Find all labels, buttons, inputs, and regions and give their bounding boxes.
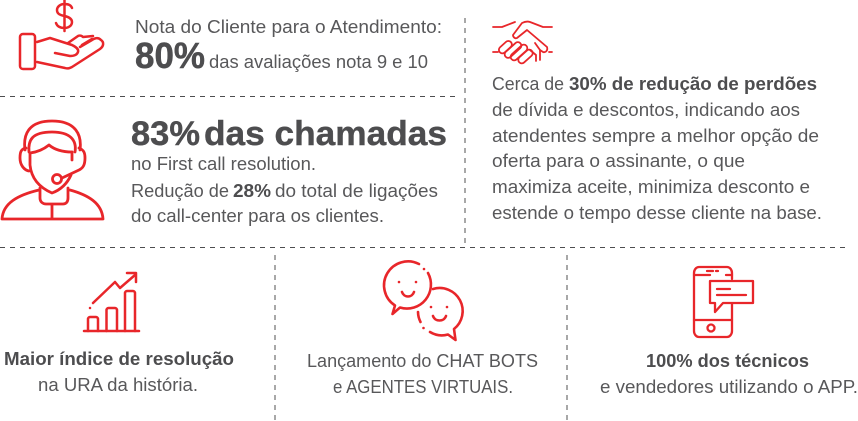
text: technicians using the app: e vendedores utilizando o APP.	[600, 376, 858, 397]
icon: smiling chat bubbles	[384, 261, 463, 340]
text: loss reduction paragraph: oferta para o assinante, o que	[492, 150, 745, 171]
text: loss reduction paragraph: de dívida e descontos, indicando aos	[492, 99, 800, 120]
text: highest resolution index: Maior índice de resolução	[4, 348, 234, 369]
icon: hand holding dollar	[20, 0, 103, 69]
text: first call resolution details: do call-center para os clientes.	[131, 205, 384, 226]
text: loss reduction paragraph	[492, 73, 822, 223]
text: chatbots launch: Lançamento do CHAT BOTS	[307, 350, 538, 371]
stat: 80% of ratings	[135, 35, 428, 76]
stat: 83% of calls: das chamadas	[204, 115, 447, 153]
text: technicians using the app: 100% dos técnicos	[646, 350, 809, 371]
text: loss reduction paragraph: 30% de redução de perdões	[569, 73, 817, 94]
text: first call resolution details: no First call resolution.	[131, 153, 316, 174]
icon: smartphone with message	[694, 267, 753, 337]
icon: growth bar chart	[84, 273, 139, 331]
stat: 80% of ratings: 80%	[135, 35, 205, 76]
text: chatbots launch: e AGENTES VIRTUAIS.	[333, 376, 513, 397]
text: loss reduction paragraph: Cerca de	[492, 73, 564, 94]
text: customer score heading: Nota do Cliente para o Atendimento:	[135, 16, 442, 37]
text: highest resolution index: na URA da história.	[38, 374, 198, 395]
stat: 83% of calls: 83%	[131, 115, 200, 153]
text: loss reduction paragraph: atendentes sempre a melhor opção de	[492, 125, 819, 146]
text: loss reduction paragraph: estende o tempo desse cliente na base.	[492, 202, 822, 223]
icon: handshake	[493, 22, 552, 65]
stat: 80% of ratings: das avaliações nota 9 e 10	[209, 51, 428, 72]
text: first call resolution details	[131, 153, 438, 226]
text: highest resolution index	[4, 348, 234, 395]
text: first call resolution details: 28%	[233, 180, 271, 201]
text: first call resolution details: Redução de	[131, 180, 229, 201]
text: chatbots launch	[307, 350, 538, 397]
text: technicians using the app	[600, 350, 858, 397]
icon: call-center agent	[2, 121, 103, 219]
text: first call resolution details: do total de ligações	[275, 180, 438, 201]
text: loss reduction paragraph: maximiza aceite, minimiza desconto e	[492, 176, 810, 197]
